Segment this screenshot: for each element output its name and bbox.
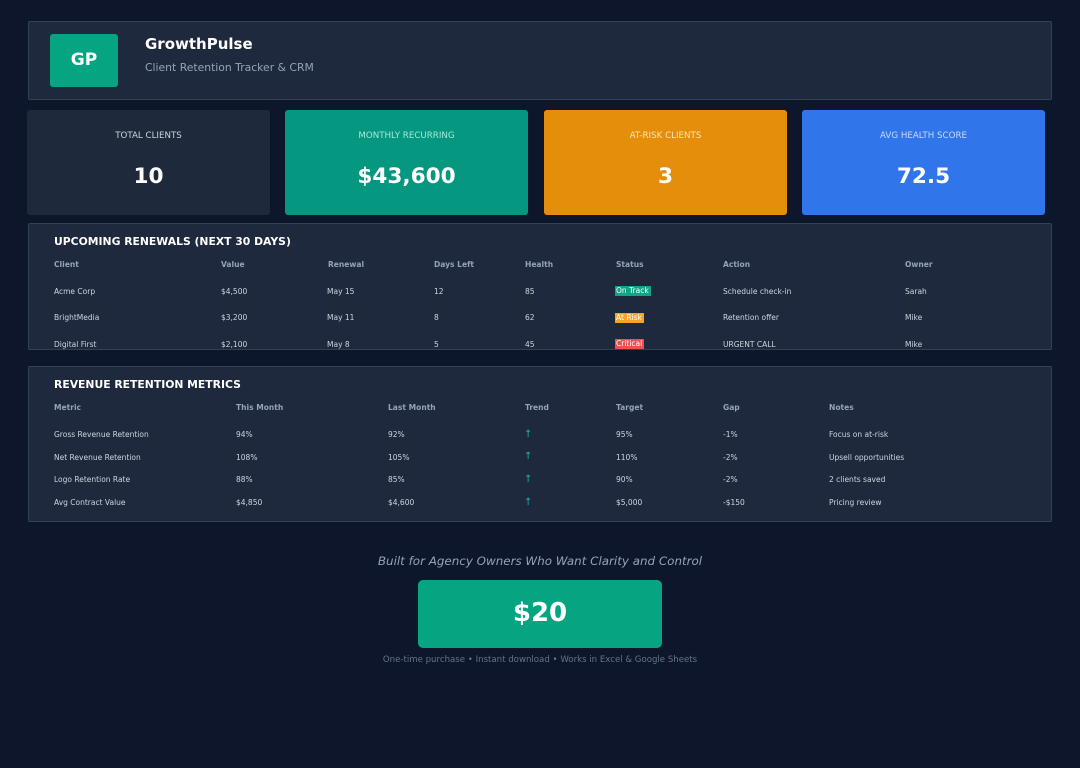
stat card: average health score: AVG HEALTH SCORE <box>880 131 967 141</box>
renewals table: May 15 <box>327 287 354 296</box>
metrics table: 95% <box>616 430 633 439</box>
stat card: at-risk clients: AT-RISK CLIENTS <box>630 131 701 141</box>
metrics table: Logo Retention Rate <box>54 475 130 484</box>
metrics table: $4,850 <box>236 498 262 507</box>
renewals table: May 11 <box>327 313 354 322</box>
renewals table: Renewal <box>328 260 364 269</box>
metrics table: $4,600 <box>388 498 414 507</box>
metrics table: Net Revenue Retention <box>54 453 141 462</box>
renewals table: Health <box>525 260 553 269</box>
renewals table: Schedule check-in <box>723 287 791 296</box>
metrics table: Focus on at-risk <box>829 430 888 439</box>
metrics table: ↑ <box>524 474 532 485</box>
renewals table: May 8 <box>327 340 350 349</box>
stat card: average health score <box>802 110 1045 215</box>
renewals table: 45 <box>525 340 535 349</box>
metrics table: Upsell opportunities <box>829 453 904 462</box>
status badge: at risk: At Risk <box>616 313 642 322</box>
metrics table: Gap <box>723 403 740 412</box>
renewals table: Action <box>723 260 750 269</box>
renewals table: 5 <box>434 340 439 349</box>
metrics table: -$150 <box>723 498 745 507</box>
renewals heading: UPCOMING RENEWALS (NEXT 30 DAYS) <box>54 235 291 248</box>
renewals table: URGENT CALL <box>723 340 776 349</box>
stat card: at-risk clients: 3 <box>658 164 673 189</box>
renewals table: 12 <box>434 287 444 296</box>
metrics table: -1% <box>723 430 738 439</box>
price button: $20 <box>513 598 567 628</box>
metrics table: Trend <box>525 403 549 412</box>
renewals table: Digital First <box>54 340 96 349</box>
stat card: monthly recurring <box>285 110 528 215</box>
panel: revenue retention metrics <box>28 366 1052 522</box>
renewals table: Days Left <box>434 260 474 269</box>
renewals table: Retention offer <box>723 313 779 322</box>
stat card: total clients <box>27 110 270 215</box>
renewals table: Status <box>616 260 644 269</box>
renewals table: Client <box>54 260 79 269</box>
metrics table <box>54 403 904 508</box>
renewals table: 8 <box>434 313 439 322</box>
renewals table: 62 <box>525 313 535 322</box>
metrics table: 2 clients saved <box>829 475 885 484</box>
app name: GrowthPulse <box>145 35 253 53</box>
metrics table: 105% <box>388 453 409 462</box>
metrics table: -2% <box>723 475 738 484</box>
metrics table: This Month <box>236 403 283 412</box>
metrics table: Notes <box>829 403 854 412</box>
renewals table: $3,200 <box>221 313 247 322</box>
metrics table: 92% <box>388 430 405 439</box>
renewals table: Owner <box>905 260 933 269</box>
renewals table: Mike <box>905 340 922 349</box>
renewals table: $4,500 <box>221 287 247 296</box>
renewals table: Mike <box>905 313 922 322</box>
renewals table: Acme Corp <box>54 287 95 296</box>
metrics table: 108% <box>236 453 257 462</box>
tagline: Built for Agency Owners Who Want Clarity and Control <box>378 554 702 568</box>
metrics table: Target <box>616 403 643 412</box>
subtitle: Client Retention Tracker & CRM <box>145 61 314 74</box>
renewals table <box>54 260 933 349</box>
purchase details: One-time purchase • Instant download • Works in Excel & Google Sheets <box>383 655 697 665</box>
metrics table: 88% <box>236 475 253 484</box>
stat card: at-risk clients <box>544 110 787 215</box>
metrics table: 94% <box>236 430 253 439</box>
renewals table: BrightMedia <box>54 313 99 322</box>
metrics heading: REVENUE RETENTION METRICS <box>54 378 241 391</box>
renewals table: $2,100 <box>221 340 247 349</box>
stat card: average health score: 72.5 <box>897 164 950 189</box>
renewals table: 85 <box>525 287 535 296</box>
metrics table: 90% <box>616 475 633 484</box>
status badge: critical: Critical <box>616 339 642 348</box>
metrics table: Last Month <box>388 403 436 412</box>
metrics table: Avg Contract Value <box>54 498 126 507</box>
metrics table: 110% <box>616 453 637 462</box>
stat card: monthly recurring: $43,600 <box>357 164 456 189</box>
status badge: on track: On Track <box>616 286 649 295</box>
metrics table: -2% <box>723 453 738 462</box>
renewals table: Value <box>221 260 245 269</box>
header panel <box>28 21 1052 100</box>
metrics table: $5,000 <box>616 498 642 507</box>
stat card: total clients: 10 <box>133 164 164 189</box>
stat card: total clients: TOTAL CLIENTS <box>115 131 182 141</box>
metrics table: ↑ <box>524 451 532 462</box>
metrics table: Metric <box>54 403 81 412</box>
metrics table: 85% <box>388 475 405 484</box>
metrics table: ↑ <box>524 429 532 440</box>
logo badge <box>50 34 118 87</box>
stat card: monthly recurring: MONTHLY RECURRING <box>358 131 455 141</box>
metrics table: ↑ <box>524 497 532 508</box>
renewals table: Sarah <box>905 287 927 296</box>
metrics table: Gross Revenue Retention <box>54 430 149 439</box>
panel: upcoming renewals <box>28 223 1052 350</box>
logo badge: GP <box>71 50 97 70</box>
price button <box>418 580 662 648</box>
metrics table: Pricing review <box>829 498 881 507</box>
